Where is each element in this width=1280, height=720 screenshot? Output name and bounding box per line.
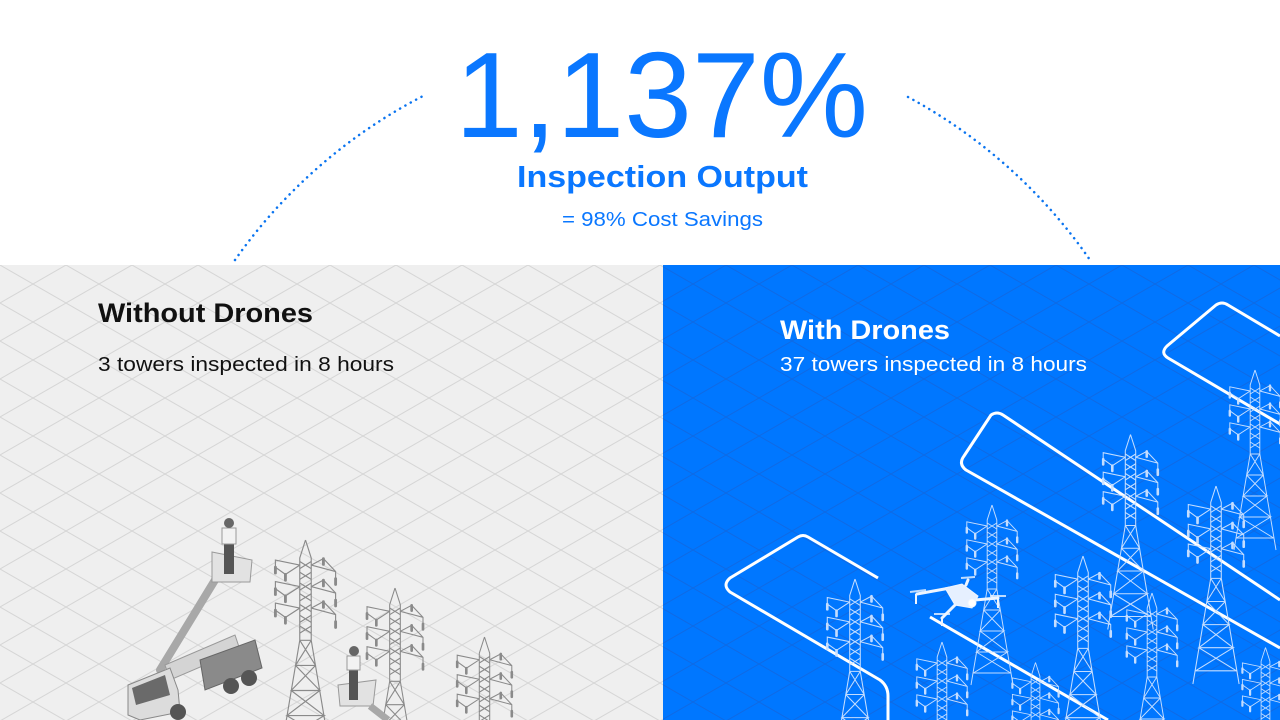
- dotted arc left: [235, 95, 425, 260]
- gray towers: [275, 540, 512, 720]
- panel: without drones: [0, 265, 663, 720]
- heading: Without Drones: Without Drones: [98, 298, 313, 328]
- text: 3 towers: 3 towers inspected in 8 hours: [98, 354, 394, 376]
- subheading: Inspection Output: Inspection Output: [517, 159, 808, 194]
- flight path loops: [726, 303, 1280, 720]
- dotted arc right: [908, 97, 1090, 260]
- icon: drone: [910, 577, 1006, 626]
- heading: With Drones: With Drones: [780, 315, 950, 345]
- cost savings note: = 98% Cost Savings: [562, 209, 763, 231]
- headline number: 1,137%: [455, 27, 868, 163]
- illustration: bucket truck with workers: [128, 518, 388, 720]
- text: 37 towers: 37 towers inspected in 8 hours: [780, 354, 1087, 376]
- blue-white towers: [827, 370, 1280, 720]
- panel: with drones: [663, 265, 1280, 720]
